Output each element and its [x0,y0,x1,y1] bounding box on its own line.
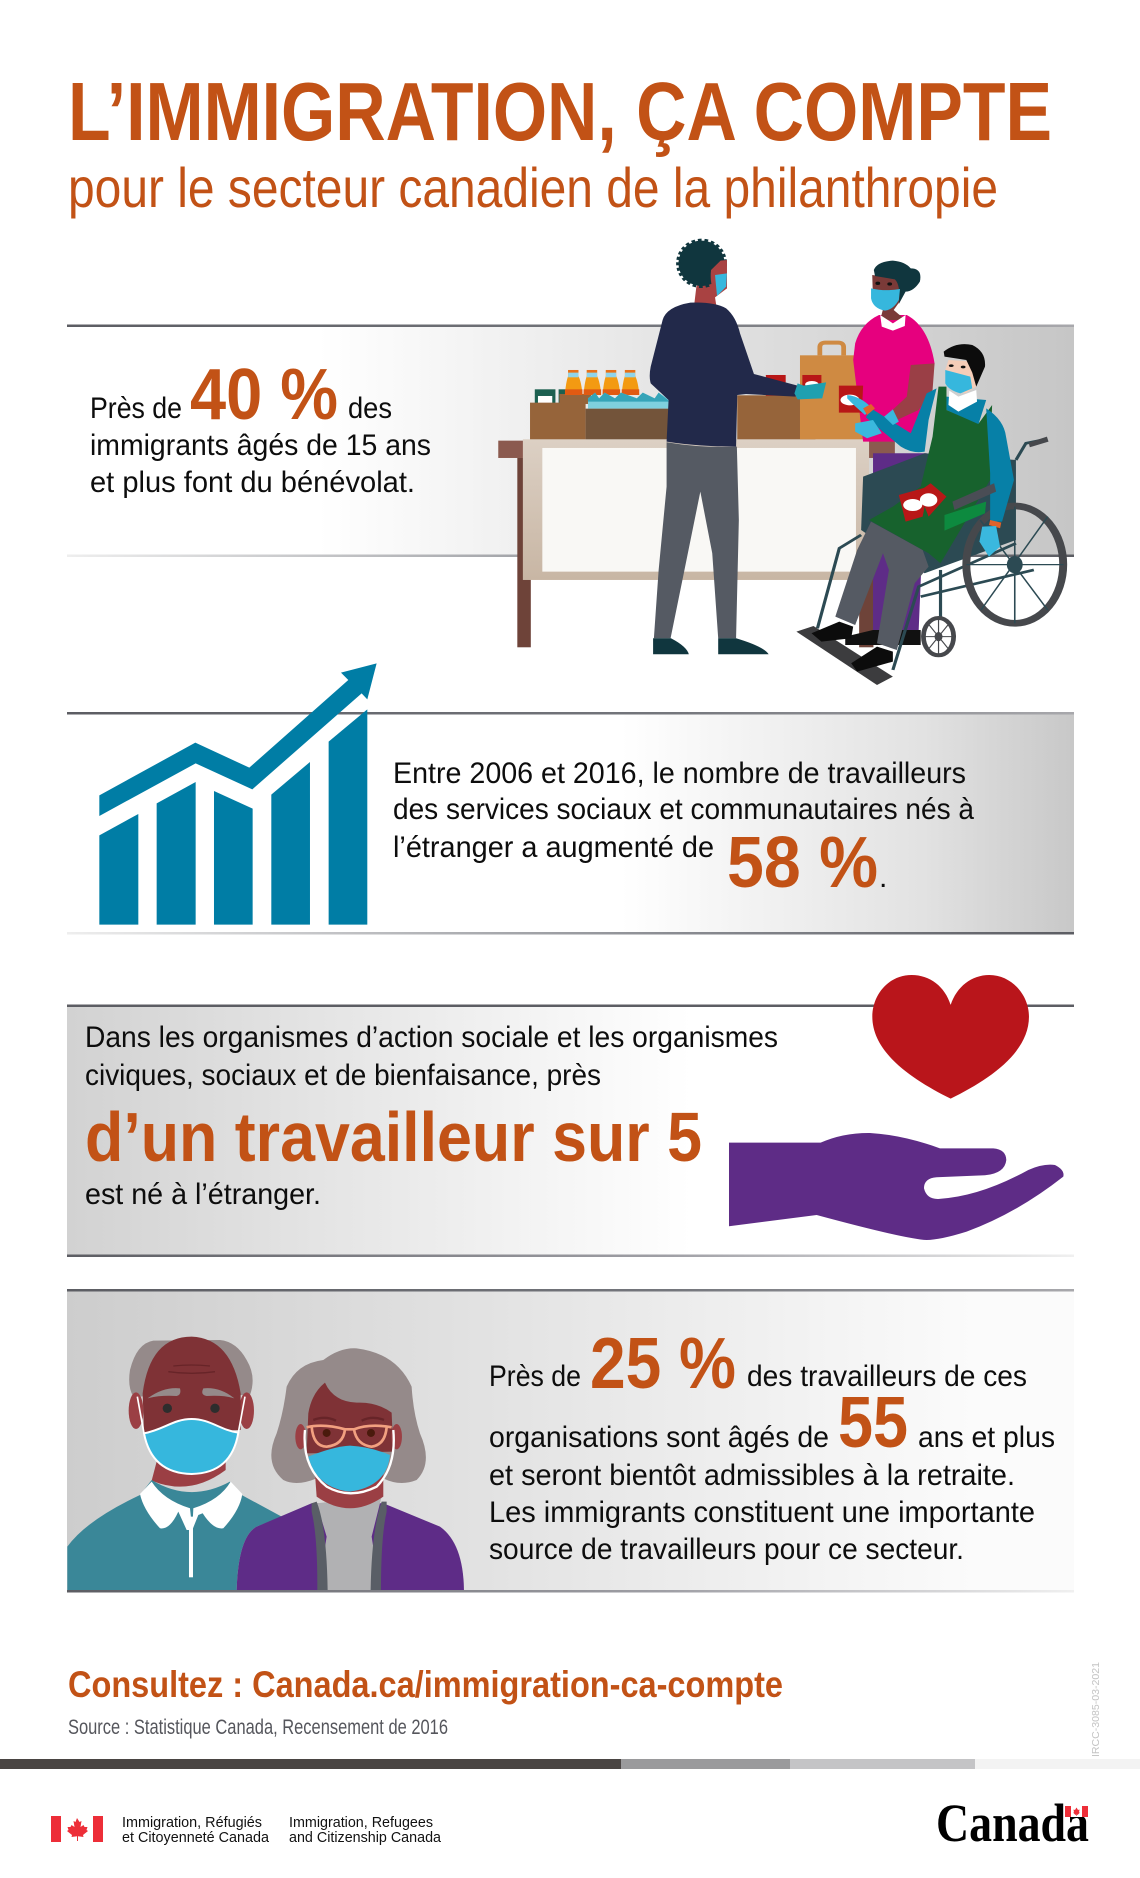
text: 58 percent increase: Entre 2006 et 2016, le nombre de travailleurs [393,757,966,790]
text: 25 percent aged 55 and over: 55 [838,1383,908,1463]
bar chart with rising arrow [99,663,377,925]
subtitle: pour le secteur canadien de la philanthropie [68,156,998,219]
logo: Government of Canada flag signature: Immigration, Réfugiés [122,1814,262,1831]
source note: Source : Statistique Canada, Recensement de 2016 [68,1716,448,1739]
older man [67,1337,282,1590]
text: 58 percent increase: des services sociaux et communautaires nés à [393,793,974,826]
document code: IRCC-3085-03-2021 [1090,1662,1102,1757]
text: one worker in five: civiques, sociaux et de bienfaisance, près [85,1059,601,1092]
illustration: food bank volunteers [498,241,1064,685]
panel: one worker in five [67,975,1074,1257]
panel: retirement [67,1289,1074,1592]
footer colour bar [0,1759,1140,1769]
text: 25 percent aged 55 and over: Les immigrants constituent une importante [489,1496,1035,1529]
call to action link: Consultez : Canada.ca/immigration-ca-compte [68,1664,783,1705]
text: one worker in five: d’un travailleur sur 5 [85,1098,702,1176]
text: 25 percent aged 55 and over: Près de [489,1360,581,1393]
table [498,439,895,647]
logo: Government of Canada flag signature [51,1814,442,1846]
text: 40 percent volunteer [90,355,431,499]
text: 40 percent volunteer: et plus font du bénévolat. [90,466,415,499]
man in wheelchair [796,344,1064,685]
text: 40 percent volunteer: immigrants âgés de 15 ans [90,429,431,462]
logo: Canada wordmark: Canada [936,1793,1089,1853]
panel: foreign-born workers growth [67,663,1074,934]
text: 25 percent aged 55 and over: organisations sont âgés de [489,1421,829,1454]
text: 40 percent volunteer: des [348,392,392,425]
logo: Government of Canada flag signature: and Citizenship Canada [289,1829,442,1846]
text: 58 percent increase: . [879,861,887,894]
older woman [237,1348,464,1590]
illustration: older couple in masks [67,1337,464,1590]
text: one worker in five [85,1021,778,1211]
text: 25 percent aged 55 and over [489,1324,1055,1566]
text: 25 percent aged 55 and over: 25 % [590,1324,736,1404]
text: one worker in five: Dans les organismes d’action sociale et les organismes [85,1021,778,1054]
text: 40 percent volunteer: Près de [90,392,182,425]
woman in pink [845,261,935,645]
text: 58 percent increase [393,757,974,903]
text: 25 percent aged 55 and over: source de travailleurs pour ce secteur. [489,1533,964,1566]
text: 40 percent volunteer: 40 % [190,355,338,435]
text: 25 percent aged 55 and over: et seront bientôt admissibles à la retraite. [489,1459,1015,1492]
icon: heart above open hand [729,975,1064,1240]
text: 58 percent increase: l’étranger a augmenté de [393,831,714,864]
text: one worker in five: est né à l’étranger. [85,1178,321,1211]
logo: Government of Canada flag signature: et Citoyenneté Canada [122,1829,270,1846]
paper bag [800,343,863,439]
grocery boxes and bottles [530,370,815,439]
man from behind [650,241,826,654]
text: 25 percent aged 55 and over: ans et plus [918,1421,1055,1454]
text: 58 percent increase: 58 % [727,823,878,903]
panel: volunteering [67,241,1074,685]
logo: Government of Canada flag signature: Immigration, Refugees [289,1814,433,1831]
text: 25 percent aged 55 and over: des travailleurs de ces [747,1360,1027,1393]
